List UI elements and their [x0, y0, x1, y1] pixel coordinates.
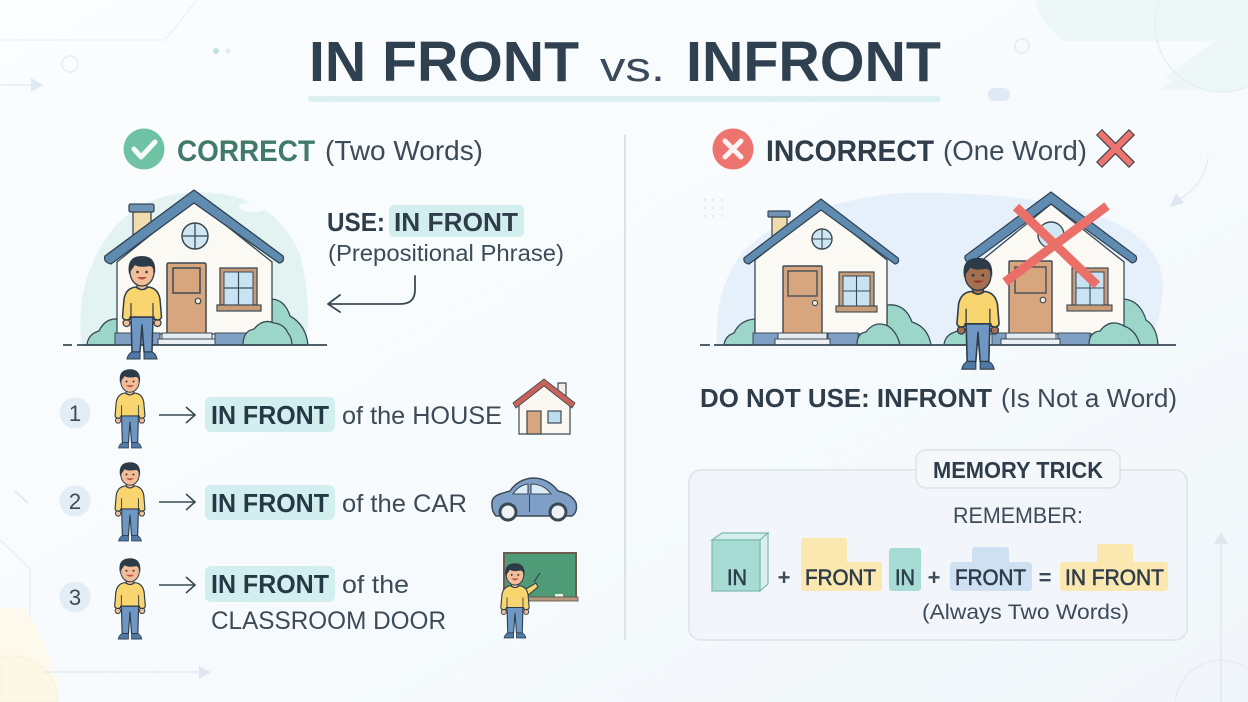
illustration: person in front of house [63, 190, 327, 359]
house: crossed out [944, 192, 1158, 345]
center divider [624, 135, 626, 640]
example 3: classroom door: of the [342, 571, 409, 599]
title: IN FRONT [309, 30, 579, 94]
callout: use in front: IN FRONT [394, 207, 518, 237]
ground line [700, 344, 1176, 346]
example 3: classroom door: IN FRONT [211, 569, 329, 599]
text: always two words: (Always Two Words) [922, 601, 1129, 624]
block: front blue: FRONT [955, 565, 1026, 590]
arrow: points to person [328, 276, 415, 312]
heading: correct two words: CORRECT [177, 135, 315, 168]
example 2: car: 2 [69, 489, 81, 514]
text: do not use: DO NOT USE: INFRONT [700, 383, 992, 413]
callout: use in front: USE: [327, 207, 385, 237]
example 1: house: 1 [69, 401, 81, 426]
block: front blue [950, 547, 1032, 591]
badge: memory trick: MEMORY TRICK [933, 457, 1103, 483]
heading: correct two words [124, 128, 483, 170]
house: plain [724, 199, 931, 345]
icon: red cross [1099, 132, 1132, 165]
example 3: classroom door: 3 [69, 585, 81, 610]
big red cross [1005, 206, 1107, 285]
heading: incorrect one word [712, 128, 1132, 170]
equation blocks [712, 533, 1168, 591]
example 1: house: of the HOUSE [342, 402, 502, 430]
equation blocks: + [928, 565, 940, 590]
illustration: two houses with person [700, 192, 1176, 369]
example 2: car [60, 462, 576, 541]
example 2: car: of the CAR [342, 490, 467, 518]
example 1: house: IN FRONT [211, 400, 329, 430]
equation blocks: + [778, 565, 790, 590]
icon: small house [513, 379, 575, 434]
block: in teal [889, 548, 921, 591]
block: in front result [1060, 544, 1168, 591]
example 2: car: IN FRONT [211, 488, 329, 518]
cube: in [712, 533, 768, 591]
heading: incorrect one word: INCORRECT [766, 135, 934, 168]
callout: use in front [327, 205, 564, 266]
callout: use in front: (Prepositional Phrase) [328, 240, 564, 266]
equation blocks: = [1039, 565, 1051, 590]
text: remember: REMEMBER: [953, 503, 1083, 528]
title [308, 30, 941, 102]
panel: memory trick [689, 450, 1187, 640]
person: dark hair figure [957, 258, 999, 369]
example 3: classroom door [60, 553, 578, 639]
title: INFRONT [686, 30, 941, 94]
block: in front result: IN FRONT [1065, 565, 1164, 590]
panel: correct [60, 128, 578, 639]
example 1: house [60, 369, 575, 448]
heading: correct two words: (Two Words) [325, 135, 483, 166]
icon: teacher at chalkboard [501, 553, 578, 638]
panel: incorrect [689, 128, 1187, 640]
cube: in: IN [727, 565, 747, 590]
heading: incorrect one word: (One Word) [943, 135, 1087, 166]
text: do not use [700, 383, 1177, 413]
block: in teal: IN [895, 565, 915, 590]
title: vs. [600, 43, 665, 90]
example 3: classroom door: CLASSROOM DOOR [211, 607, 446, 635]
icon: car [492, 478, 576, 520]
block: front yellow [801, 538, 882, 591]
block: front yellow: FRONT [805, 565, 876, 590]
text: do not use: (Is Not a Word) [1001, 383, 1177, 413]
badge: memory trick [916, 450, 1120, 488]
